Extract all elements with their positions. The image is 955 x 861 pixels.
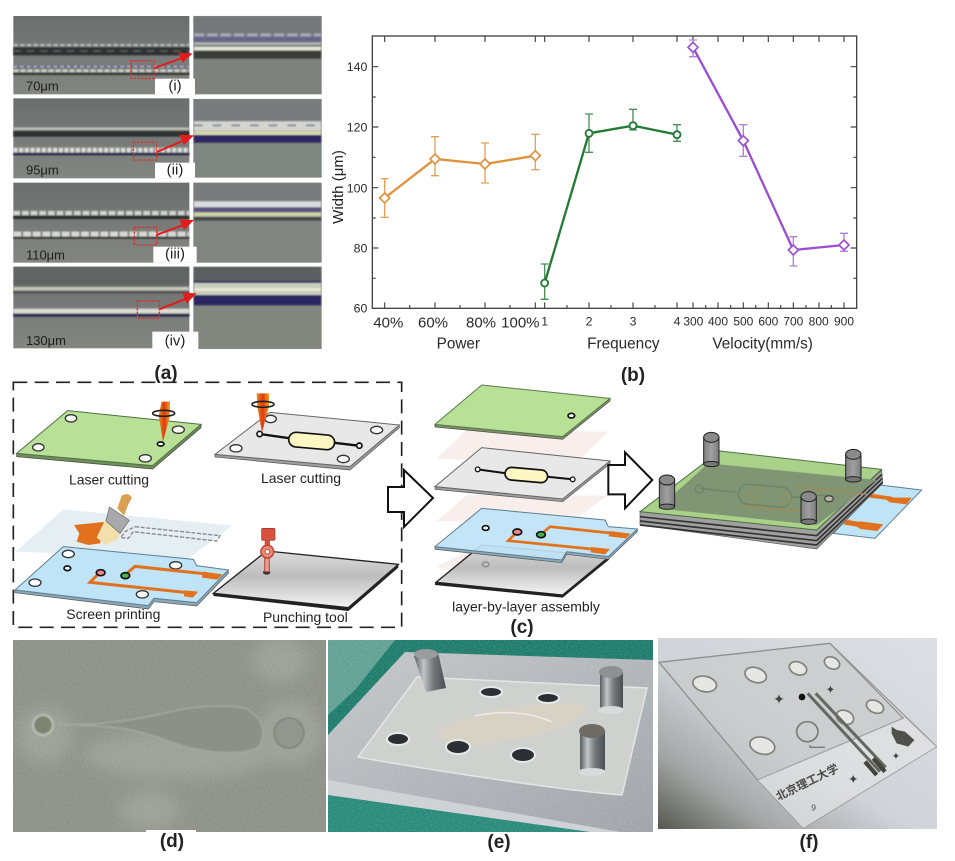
row ii: 95 micrometre channel [13, 98, 322, 179]
velocity tick labels: 700 [783, 314, 804, 328]
series: velocity [688, 40, 849, 266]
caption b: (b) [621, 365, 645, 386]
x tick marks [385, 36, 844, 308]
velocity tick labels: 300 [683, 314, 704, 328]
post 1 [704, 432, 719, 467]
caption f: (f) [800, 832, 818, 853]
label: laser cutting 1: Laser cutting [69, 471, 149, 487]
fixture post 1 [414, 649, 446, 692]
panel a: laser-cut channel micrographs [13, 16, 322, 349]
series: power [380, 134, 540, 217]
velocity tick labels: 900 [834, 314, 854, 328]
row i: 70 micrometre channel: (i) [168, 78, 182, 95]
step: punching tool [213, 528, 398, 611]
label: 70 micrometres: 70μm [26, 78, 59, 93]
y axis labels: 120 [347, 121, 367, 135]
caption a: (a) [154, 363, 178, 384]
velocity tick labels: 600 [758, 314, 779, 328]
power tick labels: 100% [501, 314, 539, 331]
velocity tick labels: 400 [708, 314, 728, 328]
assembled chip [640, 432, 922, 549]
panel f: photo of finished chip: ✦ [892, 751, 900, 762]
chip number: 9 [811, 802, 816, 812]
row ii: 95 micrometre channel: (ii) [167, 162, 183, 179]
power tick labels: 80% [466, 314, 496, 331]
y axis title: Width (μm) [330, 150, 347, 224]
power tick labels: 40% [373, 314, 403, 331]
panel d: micrograph of bonded channel [13, 638, 326, 832]
post 4 [801, 492, 816, 524]
label: 130 micrometres: 130μm [26, 333, 66, 348]
y axis labels: 60 [354, 302, 367, 316]
post 3 [659, 475, 675, 509]
y axis labels: 140 [347, 60, 367, 74]
frequency tick labels: 2 [586, 314, 593, 328]
exploded layer stack [435, 385, 637, 598]
panel f: photo of finished chip: ✦ [848, 772, 859, 786]
label: 110 micrometres: 110μm [26, 247, 65, 262]
arrow: steps to assembly [388, 470, 433, 527]
panel e: photo of chip on steel fixture [328, 640, 653, 832]
power tick labels [373, 314, 539, 331]
step: grey plate laser cutting [215, 393, 399, 470]
velocity tick labels: 800 [809, 314, 829, 328]
label: (ii) [155, 163, 195, 178]
caption d: (d) [160, 831, 184, 852]
power tick labels: 60% [418, 314, 448, 331]
y axis labels: 80 [354, 242, 367, 256]
frequency tick labels: 1 [541, 314, 548, 328]
notch under panel d [146, 830, 196, 833]
step: screen printing mask and plate [15, 494, 233, 609]
velocity tick labels [683, 314, 854, 328]
step: green plate laser cutting [17, 402, 201, 469]
label: punching tool: Punching tool [263, 609, 348, 625]
panel c left: dashed fabrication steps box [13, 382, 402, 627]
y tick marks [372, 67, 857, 278]
chip lettering: 北京理工大学 [774, 761, 841, 803]
panel b: line chart of channel width [347, 36, 857, 353]
fixture post 2 [598, 666, 624, 714]
icon: printing brush [74, 494, 132, 545]
label: (i) [155, 79, 195, 94]
row iv: 130 micrometre channel [13, 267, 322, 349]
panel f: photo of finished chip [658, 638, 937, 829]
series: frequency [541, 109, 681, 299]
panel f: photo of finished chip: ✦ [773, 691, 785, 707]
velocity tick labels: 500 [733, 314, 754, 328]
y axis labels [347, 60, 367, 316]
axis group titles: Velocity(mm/s) [712, 336, 813, 353]
axis group titles: Power [437, 336, 480, 353]
label: screen printing: Screen printing [66, 606, 160, 622]
frequency tick labels: 4 [674, 314, 681, 328]
label: laser cutting 2: Laser cutting [261, 470, 341, 486]
label: (iv) [152, 332, 198, 349]
row i: 70 micrometre channel [13, 16, 322, 95]
label: layer-by-layer assembly: layer-by-layer assembly [452, 599, 600, 615]
caption c: (c) [510, 617, 534, 638]
y axis labels: 100 [347, 181, 367, 195]
arrow: assembly to device [608, 452, 652, 508]
caption e: (e) [487, 832, 511, 853]
row iii: 110 micrometre channel [13, 183, 322, 263]
frequency tick labels: 3 [630, 314, 637, 328]
label: (iii) [153, 247, 197, 263]
frequency tick labels [541, 314, 681, 328]
panel c middle and right: assembly [435, 385, 922, 615]
axis group titles [437, 336, 813, 353]
post 2 [846, 449, 861, 482]
label: 95 micrometres: 95μm [26, 162, 59, 177]
row iv: 130 micrometre channel: (iv) [165, 332, 185, 349]
panel f: photo of finished chip: ✦ [826, 684, 835, 696]
row iii: 110 micrometre channel: (iii) [165, 246, 185, 263]
axis group titles: Frequency [587, 336, 660, 353]
fixture post 3 [578, 724, 606, 776]
